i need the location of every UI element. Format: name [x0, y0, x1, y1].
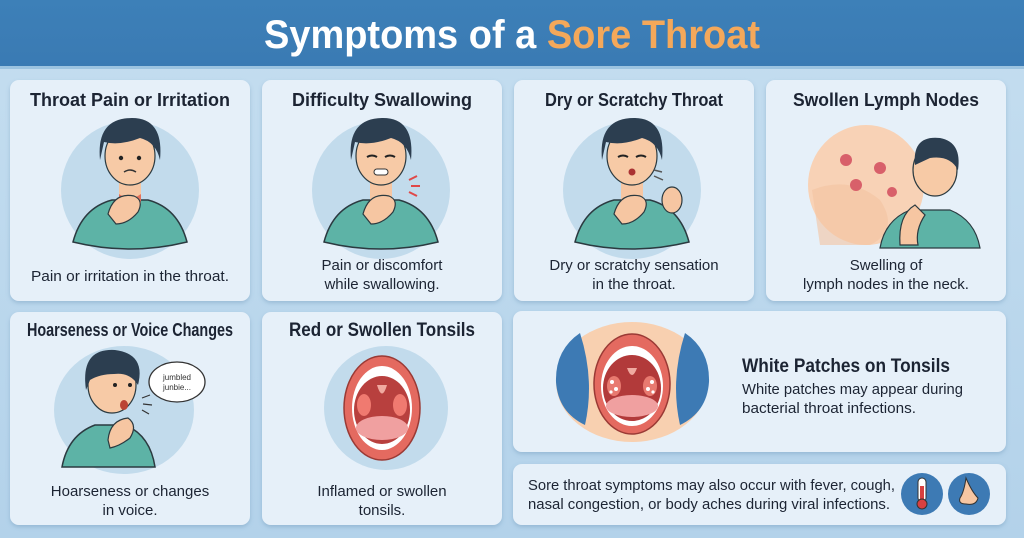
panel: dry throat [514, 80, 754, 301]
panel: hoarseness: in voice. [102, 502, 158, 519]
icon: neck with lymph nodes [808, 125, 980, 248]
description: white patches: White patches may appear during [742, 381, 963, 398]
title bar [0, 0, 1024, 69]
panel: other symptoms note: nasal congestion, or body aches during viral infections. [528, 496, 890, 513]
heading: red tonsils: Red or Swollen Tonsils [289, 320, 475, 341]
panel: white patches [513, 311, 1006, 452]
panel: difficulty swallowing: while swallowing. [323, 276, 440, 293]
panel: swollen lymph nodes: lymph nodes in the neck. [803, 276, 969, 293]
icon: person swallowing [312, 118, 450, 259]
heading: lymph nodes: Swollen Lymph Nodes [793, 90, 979, 110]
text: other symptoms: Sore throat symptoms may also occur with fever, cough, [528, 477, 895, 494]
icon: open mouth [324, 346, 448, 470]
panel: swollen lymph nodes [766, 80, 1006, 301]
panel: dry throat: in the throat. [592, 276, 676, 293]
icon: mouth with white patches [556, 322, 709, 442]
panel: white patches: bacterial throat infections. [742, 400, 916, 417]
icon: person with speech bubble: junbie... [162, 383, 191, 392]
description: throat pain: Pain or irritation in the throat. [31, 268, 229, 285]
heading: white patches: White Patches on Tonsils [742, 356, 950, 377]
description: hoarseness: Hoarseness or changes [51, 483, 209, 500]
heading: throat pain: Throat Pain or Irritation [30, 90, 230, 110]
description: lymph nodes: Swelling of [850, 257, 923, 274]
panel: throat pain [10, 80, 250, 301]
heading: hoarseness: Hoarseness or Voice Changes [27, 320, 233, 340]
description: dry throat: Dry or scratchy sensation [549, 257, 719, 274]
icon: person with speech bubble: jumbled [162, 373, 191, 382]
heading: dry throat: Dry or Scratchy Throat [545, 90, 723, 110]
icon: person coughing [563, 118, 701, 259]
panel: other symptoms note [513, 464, 1006, 525]
icon: thermometer [901, 473, 943, 515]
icon: nose [948, 473, 990, 515]
heading: difficulty swallowing: Difficulty Swallowing [292, 90, 472, 110]
panel: red tonsils [262, 312, 502, 525]
icon: person holding throat [61, 118, 199, 259]
panel: red tonsils: tonsils. [359, 502, 405, 519]
icon: person with speech bubble [54, 346, 205, 474]
panel: difficulty swallowing [262, 80, 502, 301]
title: Symptoms of a Sore Throat [264, 13, 760, 57]
panel: hoarseness [10, 312, 250, 525]
description: difficulty swallowing: Pain or discomfort [322, 257, 443, 274]
description: red tonsils: Inflamed or swollen [317, 483, 447, 500]
